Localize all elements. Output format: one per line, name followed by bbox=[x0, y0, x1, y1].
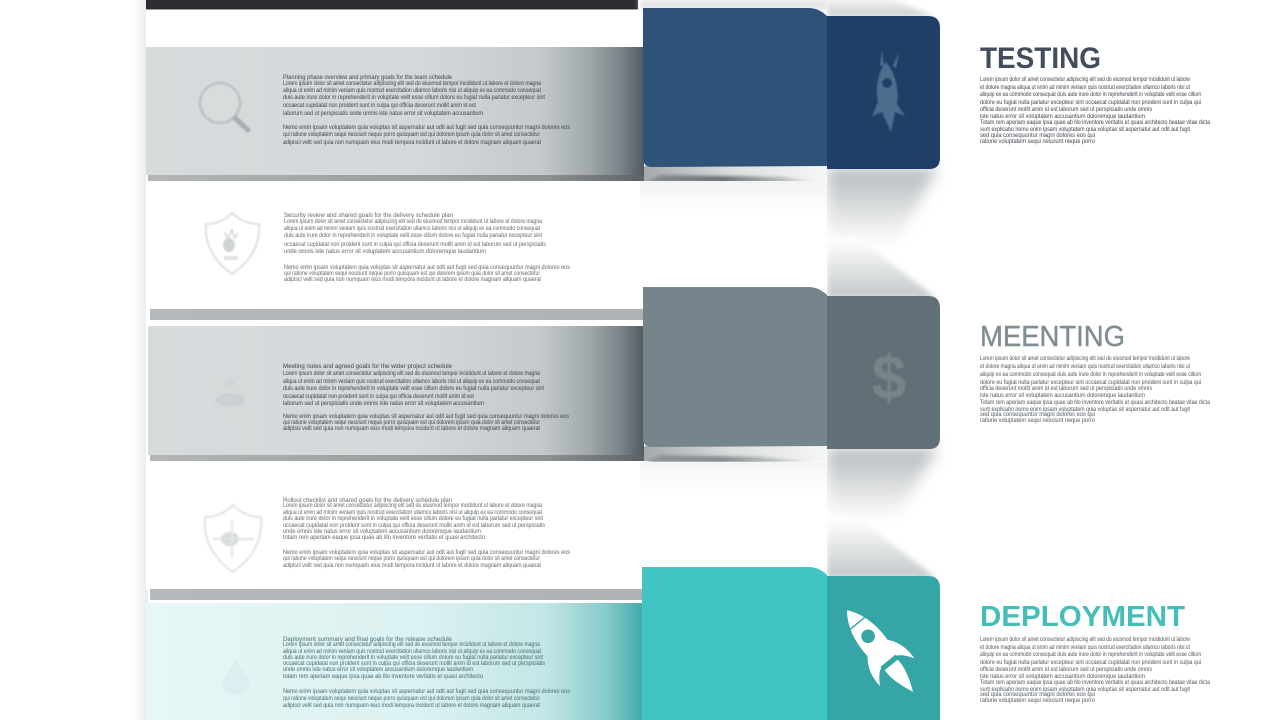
text block: testing: sunt explicabo nemo enim ipsam voluptatem quia voluptas sit aspernatur aut odit aut fugit bbox=[980, 126, 1190, 133]
text block: deployment: iste natus error sit voluptatem accusantium doloremque laudantium bbox=[980, 673, 1145, 680]
gray tab bbox=[643, 287, 940, 449]
text block: row 4: duis aute irure dolor in reprehenderit in voluptate velit esse cillum dolore eu fugiat nulla pariatur excepteur sint bbox=[283, 515, 543, 522]
text block: row 4 bbox=[283, 497, 571, 569]
text block: row 4: unde omnis iste natus error sit voluptatem accusantium doloremque laudantium bbox=[283, 528, 481, 535]
tab back: dark gray bbox=[827, 296, 940, 449]
step: testing bbox=[980, 42, 1210, 145]
text block: deployment: et dolore magna aliqua ut enim ad minim veniam quis nostrud exercitation ullamco laboris nisi ut bbox=[980, 644, 1190, 651]
text block: row 5: adipisci velit sed quia non numquam eius modi tempora incidunt ut labore et dolore magnam aliquam quaerat bbox=[283, 702, 540, 709]
tab front: blue bbox=[643, 8, 827, 167]
text block: row 5: occaecat cupidatat non proident sunt in culpa qui officia deserunt mollit anim id est laborum sed ut perspiciatis bbox=[283, 660, 546, 667]
text block: testing: Totam rem aperiam eaque ipsa quae ab illo inventore veritatis et quasi architecto beatae vitae dicta bbox=[980, 119, 1210, 126]
text block: row 4: aliqua ut enim ad minim veniam quis nostrud exercitation ullamco laboris nisi ut aliquip ex ea commodo consequat bbox=[283, 509, 542, 516]
text block: row 1: Planning phase overview and primary goals for the team schedule bbox=[283, 74, 452, 81]
text block: deployment: Lorem ipsum dolor sit amet consectetur adipiscing elit sed do eiusmod tempor incididunt ut labore bbox=[980, 636, 1190, 643]
text block: row 1: qui ratione voluptatem sequi nesciunt neque porro quisquam est qui dolorem ipsum quia dolor sit amet consectetur bbox=[283, 131, 541, 138]
heading: testing: TESTING bbox=[980, 42, 1101, 75]
text block: meeting: Lorem ipsum dolor sit amet consectetur adipiscing elit sed do eiusmod tempor incididunt ut labore bbox=[980, 355, 1190, 362]
text block: row 2: adipisci velit sed quia non numquam eius modi tempora incidunt ut labore et dolore magnam aliquam quaerat bbox=[284, 276, 541, 283]
text block: row 3: Lorem ipsum dolor sit amet consectetur adipiscing elit sed do eiusmod tempor incididunt ut labore et dolore magna bbox=[283, 370, 540, 377]
text block: deployment bbox=[980, 636, 1210, 704]
text block: meeting: officia deserunt mollit anim id est laborum sed ut perspiciatis unde omnis bbox=[980, 385, 1153, 392]
text block: testing bbox=[980, 76, 1210, 145]
panel: row 2 white shield bbox=[148, 181, 827, 320]
cast shadows right of the column bbox=[827, 0, 938, 578]
text block: meeting: aliquip ex ea commodo consequat duis aute irure dolor in reprehenderit in voluptate velit esse cillum bbox=[980, 371, 1201, 378]
text block: row 5: Nemo enim ipsam voluptatem quia voluptas sit aspernatur aut odit aut fugit sed quia consequuntur magni dolores eos bbox=[283, 688, 571, 695]
icon: faint shield bbox=[205, 367, 257, 425]
text block: row 2: Nemo enim ipsam voluptatem quia voluptas sit aspernatur aut odit aut fugit sed quia consequuntur magni dolores eos bbox=[284, 264, 571, 271]
left edge shadow bbox=[132, 0, 148, 720]
text block: row 5: duis aute irure dolor in reprehenderit in voluptate velit esse cillum dolore eu fugiat nulla pariatur excepteur sint bbox=[283, 654, 543, 661]
tab back: dark blue bbox=[827, 16, 940, 169]
text block: deployment: officia deserunt mollit anim id est laborum sed ut perspiciatis unde omnis bbox=[980, 666, 1153, 673]
text block: row 5: aliqua ut enim ad minim veniam quis nostrud exercitation ullamco laboris nisi ut aliquip ex ea commodo consequat bbox=[283, 648, 541, 655]
text block: testing: aliquip ex ea commodo consequat duis aute irure dolor in reprehenderit in voluptate velit esse cillum bbox=[980, 91, 1201, 98]
panel: row 3 gray bbox=[148, 326, 644, 461]
text block: row 2: qui ratione voluptatem sequi nesciunt neque porro quisquam est qui dolorem ipsum quia dolor sit amet consectetur bbox=[284, 270, 541, 277]
top dark bar bbox=[146, 0, 638, 10]
text block: row 3: laborum sed ut perspiciatis unde omnis iste natus error sit voluptatem accusantium bbox=[283, 400, 484, 407]
text block: row 4: Nemo enim ipsam voluptatem quia voluptas sit aspernatur aut odit aut fugit sed quia consequuntur magni dolores eos bbox=[283, 549, 571, 556]
text block: row 1: laborum sed ut perspiciatis unde omnis iste natus error sit voluptatem accusantium bbox=[283, 110, 483, 117]
text block: row 2: Lorem ipsum dolor sit amet consectetur adipiscing elit sed do eiusmod tempor incididunt ut labore et dolore magna bbox=[284, 218, 542, 225]
icon: shield with cross bbox=[205, 505, 261, 572]
text block: deployment: sed quia consequuntur magni dolores eos qui bbox=[980, 691, 1095, 698]
text block: row 4: qui ratione voluptatem sequi nesciunt neque porro quisquam est qui dolorem ipsum quia dolor sit amet consectetur bbox=[283, 555, 541, 562]
text block: row 4: totam rem aperiam eaque ipsa quae ab illo inventore veritatis et quasi architecto bbox=[283, 534, 485, 541]
panel: row 4 white shield bbox=[148, 462, 827, 600]
heading: meeting: MEENTING bbox=[980, 321, 1125, 353]
text block: row 5 bbox=[283, 636, 571, 709]
text block: row 4: Lorem ipsum dolor sit amet consectetur adipiscing elit sed do eiusmod tempor incididunt ut labore et dolore magna bbox=[283, 502, 542, 509]
text block: deployment: dolore eu fugiat nulla pariatur excepteur sint occaecat cupidatat non proident sunt in culpa qui bbox=[980, 659, 1201, 666]
text block: row 2: Security review and shared goals for the delivery schedule plan bbox=[284, 212, 453, 219]
text block: row 1: occaecat cupidatat non proident sunt in culpa qui officia deserunt mollit anim id est bbox=[283, 102, 476, 109]
text block: deployment: Totam rem aperiam eaque ipsa quae ab illo inventore veritatis et quasi architecto beatae vitae dicta bbox=[980, 679, 1210, 686]
text block: row 1: Lorem ipsum dolor sit amet consectetur adipiscing elit sed do eiusmod tempor incididunt ut labore et dolore magna bbox=[283, 80, 541, 87]
text block: testing: officia deserunt mollit anim id est laborum sed ut perspiciatis unde omnis bbox=[980, 106, 1153, 113]
text block: row 2: duis aute irure dolor in reprehenderit in voluptate velit esse cillum dolore eu fugiat nulla pariatur excepteur sint bbox=[284, 232, 542, 239]
icon: dim rocket bbox=[872, 50, 905, 132]
text block: row 3: Nemo enim ipsam voluptatem quia voluptas sit aspernatur aut odit aut fugit sed quia consequuntur magni dolores eos bbox=[283, 413, 570, 420]
text block: row 1: aliqua ut enim ad minim veniam quis nostrud exercitation ullamco laboris nisi ut aliquip ex ea commodo consequat bbox=[283, 87, 541, 94]
text block: row 3: duis aute irure dolor in reprehenderit in voluptate velit esse cillum dolore eu fugiat nulla pariatur excepteur sint bbox=[283, 385, 544, 392]
text block: row 4: Rollout checklist and shared goals for the delivery schedule plan bbox=[283, 497, 452, 504]
text block: row 2: aliqua ut enim ad minim veniam quis nostrud exercitation ullamco laboris nisi ut aliquip ex ea commodo consequat bbox=[284, 225, 540, 232]
text block: row 5: Lorem ipsum dolor sit amet consectetur adipiscing elit sed do eiusmod tempor incididunt ut labore et dolore magna bbox=[283, 641, 540, 648]
text block: row 1: duis aute irure dolor in reprehenderit in voluptate velit esse cillum dolore eu fugiat nulla pariatur excepteur sint bbox=[283, 94, 545, 101]
panel: row 1 gray search bbox=[146, 47, 644, 181]
text block: testing: et dolore magna aliqua ut enim ad minim veniam quis nostrud exercitation ullamco laboris nisi ut bbox=[980, 84, 1190, 91]
text block: testing: iste natus error sit voluptatem accusantium doloremque laudantium bbox=[980, 113, 1145, 120]
shadow under tab 1 bbox=[640, 166, 827, 183]
text block: deployment: ratione voluptatem sequi nesciunt neque porro bbox=[980, 697, 1095, 704]
white column backing bbox=[146, 10, 827, 590]
text block: row 3: Meeting notes and agreed goals for the wider project schedule bbox=[283, 363, 452, 370]
heading: deployment: DEPLOYMENT bbox=[980, 601, 1185, 633]
icon: shield with figure bbox=[206, 213, 259, 274]
text block: row 2 bbox=[284, 212, 571, 283]
icon: dollar sign: $ bbox=[872, 344, 906, 413]
teal tab bbox=[642, 567, 940, 720]
icon: white rocket bbox=[830, 596, 930, 706]
text block: row 5: unde omnis iste natus error sit voluptatem accusantium doloremque laudantium bbox=[283, 666, 473, 673]
text block: row 5: qui ratione voluptatem sequi nesciunt neque porro quisquam est qui dolorem ipsum quia dolor sit amet consectetur bbox=[283, 695, 541, 702]
panel: row 5 teal bbox=[146, 603, 644, 720]
step: meeting bbox=[980, 321, 1210, 424]
text block: deployment: aliquip ex ea commodo consequat duis aute irure dolor in reprehenderit in voluptate velit esse cillum bbox=[980, 651, 1201, 658]
shadow under tab 2 bbox=[640, 446, 827, 463]
text block: meeting: ratione voluptatem sequi nesciunt neque porro bbox=[980, 417, 1095, 424]
text block: row 3 bbox=[283, 363, 570, 432]
text block: row 3: occaecat cupidatat non proident sunt in culpa qui officia deserunt mollit anim id est bbox=[283, 393, 474, 400]
text block: row 5: Deployment summary and final goals for the release schedule bbox=[283, 636, 452, 643]
text block: meeting: iste natus error sit voluptatem accusantium doloremque laudantium bbox=[980, 392, 1145, 399]
text block: testing: ratione voluptatem sequi nesciunt neque porro bbox=[980, 138, 1095, 145]
text block: testing: dolore eu fugiat nulla pariatur excepteur sint occaecat cupidatat non proident sunt in culpa qui bbox=[980, 99, 1201, 106]
text block: row 1: Nemo enim ipsam voluptatem quia voluptas sit aspernatur aut odit aut fugit sed quia consequuntur magni dolores eos bbox=[283, 124, 571, 131]
text block: row 4: occaecat cupidatat non proident sunt in culpa qui officia deserunt mollit anim id est laborum sed ut perspiciatis bbox=[283, 522, 546, 529]
text block: row 3: aliqua ut enim ad minim veniam quis nostrud exercitation ullamco laboris nisi ut aliquip ex ea commodo consequat bbox=[283, 378, 540, 385]
tab front: gray bbox=[643, 287, 827, 447]
text block: row 2: unde omnis iste natus error sit voluptatem accusantium doloremque laudantium bbox=[284, 248, 486, 255]
text block: meeting: sunt explicabo nemo enim ipsam voluptatem quia voluptas sit aspernatur aut odit aut fugit bbox=[980, 406, 1190, 413]
tab front: teal bbox=[642, 567, 827, 720]
text block: deployment: sunt explicabo nemo enim ipsam voluptatem quia voluptas sit aspernatur aut odit aut fugit bbox=[980, 686, 1190, 693]
icon: faint rocket mark bbox=[222, 660, 250, 695]
tab back: dark teal bbox=[827, 576, 940, 720]
text block: row 2: occaecat cupidatat non proident sunt in culpa qui officia deserunt mollit anim id est laborum sed ut perspiciatis bbox=[284, 241, 547, 248]
text block: testing: sed quia consequuntur magni dolores eos qui bbox=[980, 132, 1095, 139]
text block: row 3: qui ratione voluptatem sequi nesciunt neque porro quisquam est qui dolorem ipsum quia dolor sit amet consectetur bbox=[283, 419, 541, 426]
text block: row 1 bbox=[283, 74, 571, 146]
text block: meeting bbox=[980, 355, 1210, 424]
icon: magnifier bbox=[200, 83, 248, 130]
text block: meeting: et dolore magna aliqua ut enim ad minim veniam quis nostrud exercitation ullamco laboris nisi ut bbox=[980, 363, 1190, 370]
text block: row 4: adipisci velit sed quia non numquam eius modi tempora incidunt ut labore et dolore magnam aliquam quaerat bbox=[283, 562, 541, 569]
text block: meeting: sed quia consequuntur magni dolores eos qui bbox=[980, 411, 1095, 418]
blue tab bbox=[643, 8, 940, 169]
text block: row 3: adipisci velit sed quia non numquam eius modi tempora incidunt ut labore et dolore magnam aliquam quaerat bbox=[283, 425, 540, 432]
text block: meeting: dolore eu fugiat nulla pariatur excepteur sint occaecat cupidatat non proident sunt in culpa qui bbox=[980, 379, 1201, 386]
text block: row 5: totam rem aperiam eaque ipsa quae ab illo inventore veritatis et quasi architecto bbox=[283, 673, 483, 680]
step: deployment bbox=[980, 601, 1210, 704]
text block: row 1: adipisci velit sed quia non numquam eius modi tempora incidunt ut labore et dolore magnam aliquam quaerat bbox=[283, 139, 541, 146]
text block: meeting: Totam rem aperiam eaque ipsa quae ab illo inventore veritatis et quasi architecto beatae vitae dicta bbox=[980, 399, 1210, 406]
text block: testing: Lorem ipsum dolor sit amet consectetur adipiscing elit sed do eiusmod tempor incididunt ut labore bbox=[980, 76, 1190, 83]
